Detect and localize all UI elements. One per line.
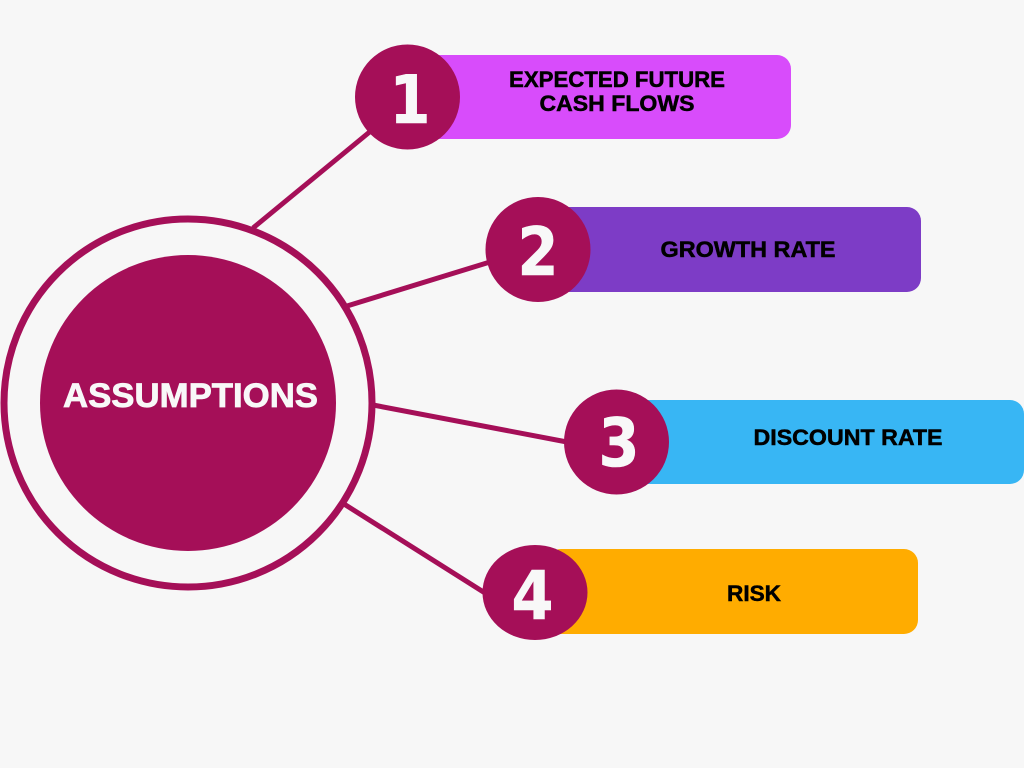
item 1: expected future cash flows: EXPECTED FUTURE xyxy=(509,67,725,92)
connector: center to item 1 xyxy=(253,130,372,228)
item 4: risk xyxy=(482,545,918,640)
item 2: growth rate: GROWTH RATE xyxy=(660,237,836,262)
item 2: growth rate xyxy=(486,197,921,302)
central circle: assumptions: ASSUMPTIONS xyxy=(63,377,318,415)
item 1: expected future cash flows xyxy=(355,44,791,150)
item 1: expected future cash flows: CASH FLOWS xyxy=(540,91,694,116)
item 3: discount rate xyxy=(564,390,1024,494)
item 4: risk: 4 xyxy=(512,557,554,635)
item 3: discount rate: 3 xyxy=(598,404,640,482)
item 1: expected future cash flows: 1 xyxy=(390,61,430,139)
connector: center to item 3 xyxy=(373,405,567,442)
item 4: risk: RISK xyxy=(727,581,781,606)
central circle: assumptions xyxy=(4,219,372,587)
item 3: discount rate: DISCOUNT RATE xyxy=(754,425,942,450)
connector: center to item 2 xyxy=(347,262,490,306)
item 2: growth rate: 2 xyxy=(518,213,558,291)
connector: center to item 4 xyxy=(344,504,485,593)
